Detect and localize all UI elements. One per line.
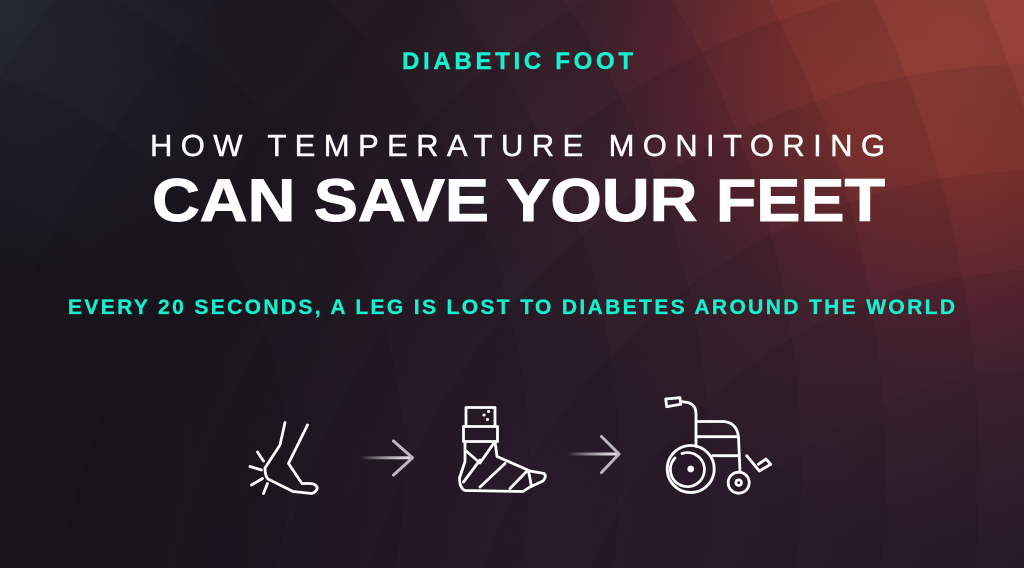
subheading: statistic: EVERY 20 SECONDS, A LEG IS LOST TO DIABETES AROUND THE WORLD <box>68 296 955 319</box>
icon: foot in cast <box>460 408 545 492</box>
icon: wheelchair <box>666 398 771 493</box>
arrow: cast to wheelchair <box>567 436 619 472</box>
arrow: foot to cast <box>360 441 412 475</box>
heading: Diabetic Foot: DIABETIC FOOT <box>402 48 633 75</box>
title: can save your feet: CAN SAVE YOUR FEET <box>152 167 885 234</box>
icon: painful foot <box>250 422 317 494</box>
title: how temperature monitoring: HOW TEMPERATURE MONITORING <box>150 128 885 163</box>
